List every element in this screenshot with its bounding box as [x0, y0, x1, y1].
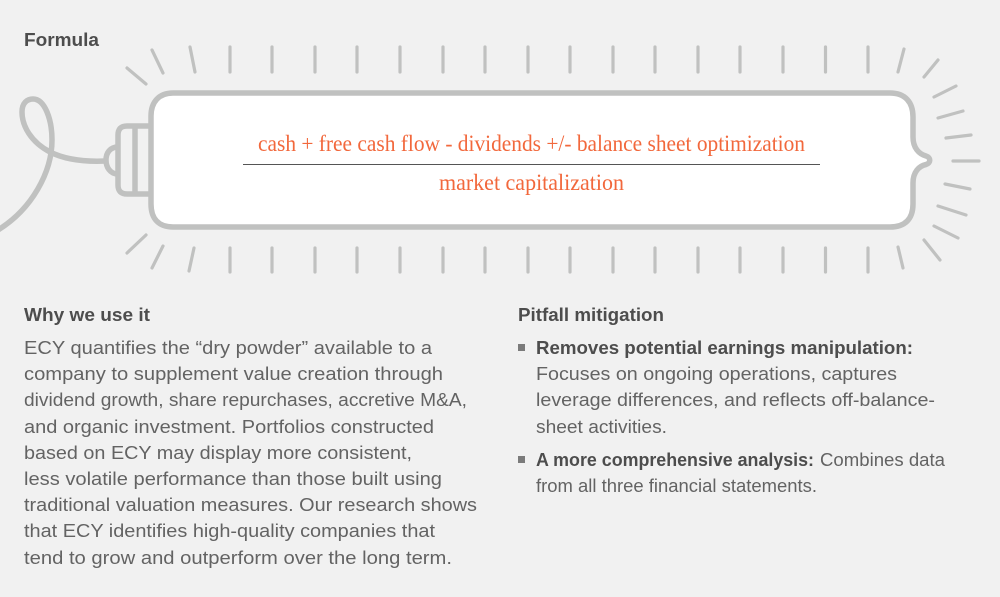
heading: Why we use it: Why we use it: [24, 305, 150, 325]
item text: [536, 338, 935, 437]
item text: leverage differences, and reflects off-balance-: [536, 390, 935, 410]
text block: why we use it: ECY quantifies the “dry powder” available to a: [24, 338, 433, 358]
text block: why we use it: traditional valuation measures. Our research shows: [24, 495, 477, 515]
icon: bulb plug: [106, 126, 151, 194]
item text: from all three financial statements.: [536, 476, 817, 496]
list item: comprehensive analysis: [518, 450, 946, 496]
text block: why we use it: that ECY identifies high-quality companies that: [24, 521, 435, 541]
item text: Combines data: [820, 450, 946, 470]
text block: why we use it: and organic investment. Portfolios constructed: [24, 417, 434, 437]
text block: why we use it: [24, 338, 477, 568]
text block: why we use it: based on ECY may display more consistent,: [24, 443, 412, 463]
icon: glowing light bulb formula box: [0, 47, 979, 272]
text block: why we use it: company to supplement value creation through: [24, 364, 443, 384]
panel: formula box: [151, 93, 930, 227]
bullet: [518, 456, 525, 463]
item text: Focuses on ongoing operations, captures: [536, 364, 897, 384]
item text: Removes potential earnings manipulation:: [536, 338, 913, 358]
formula denominator: market capitalization: [439, 170, 624, 196]
formula numerator: cash + free cash flow - dividends +/- balance sheet optimization: [258, 131, 805, 157]
item text: [536, 450, 946, 496]
item text: A more comprehensive analysis:: [536, 450, 814, 470]
text block: why we use it: dividend growth, share repurchases, accretive M&A,: [24, 390, 467, 410]
bullet: [518, 344, 525, 351]
heading: Formula: Formula: [24, 30, 100, 50]
text block: why we use it: tend to grow and outperform over the long term.: [24, 548, 452, 568]
icon: light rays: [127, 47, 979, 272]
heading: Pitfall mitigation: Pitfall mitigation: [518, 305, 664, 325]
item text: sheet activities.: [536, 417, 667, 437]
fraction line: [243, 164, 820, 165]
list item: earnings manipulation: [518, 338, 935, 437]
text block: why we use it: less volatile performance than those built using: [24, 469, 442, 489]
icon: cord: [0, 99, 106, 230]
